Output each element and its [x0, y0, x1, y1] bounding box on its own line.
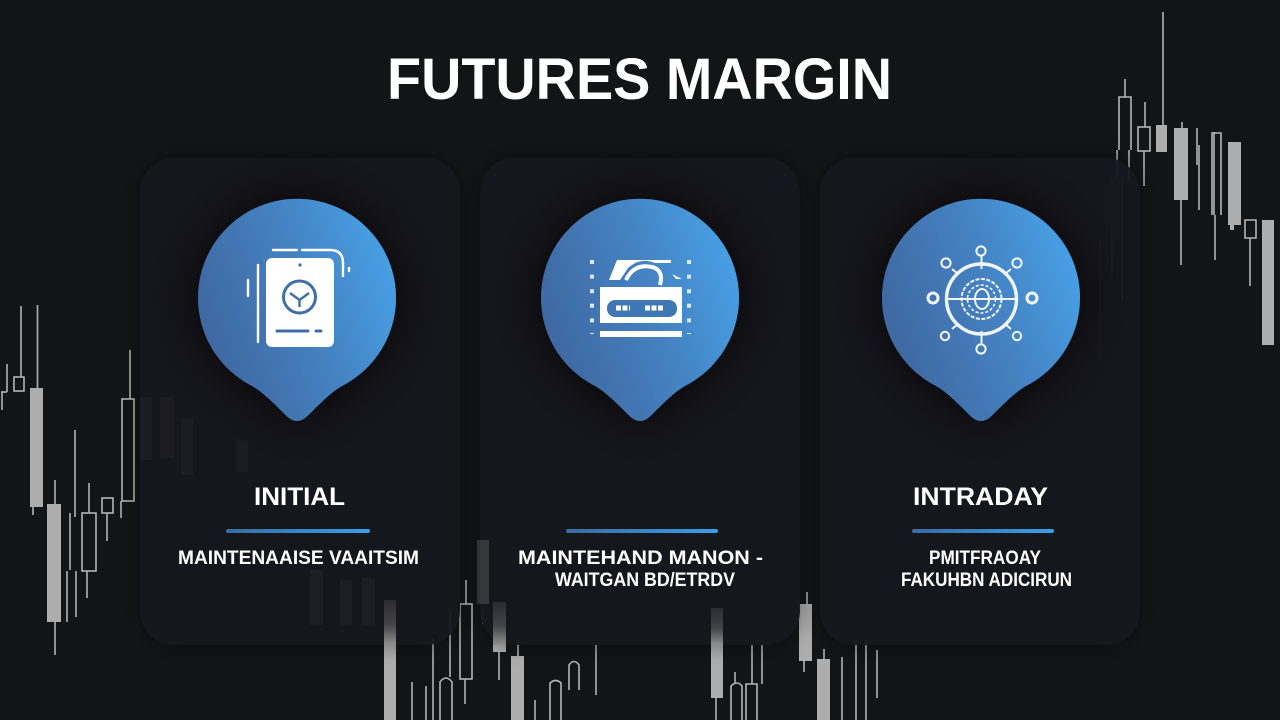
description: PMITFRAOAY	[929, 548, 1041, 569]
description: MAINTENAAISE VAAITSIM	[178, 548, 419, 569]
icon: blue pin with banknote	[541, 199, 739, 421]
panel: initial margin	[140, 158, 460, 645]
description	[901, 548, 1072, 591]
description: WAITGAN BD/ETRDV	[555, 570, 735, 591]
icon: blue pin with document and clock	[198, 199, 396, 421]
accent rule	[912, 529, 1054, 533]
title: FUTURES MARGIN	[387, 47, 892, 112]
panel: intraday margin	[820, 158, 1140, 645]
icon: blue pin with ship wheel	[882, 199, 1080, 421]
accent rule	[226, 529, 370, 533]
panel: maintenance margin	[480, 158, 800, 645]
candlestick chart: right	[1100, 12, 1274, 360]
accent rule	[566, 529, 718, 533]
heading: intraday: INTRADAY	[913, 483, 1048, 511]
candles fading through card bottoms	[310, 540, 723, 645]
description: FAKUHBN ADICIRUN	[901, 570, 1072, 591]
heading: MAINTEHAND MANON -	[518, 548, 763, 569]
candlestick chart: bottom and faint candles behind cards	[140, 397, 877, 720]
candlestick chart: left	[1, 305, 134, 655]
heading: initial: INITIAL	[254, 483, 345, 511]
